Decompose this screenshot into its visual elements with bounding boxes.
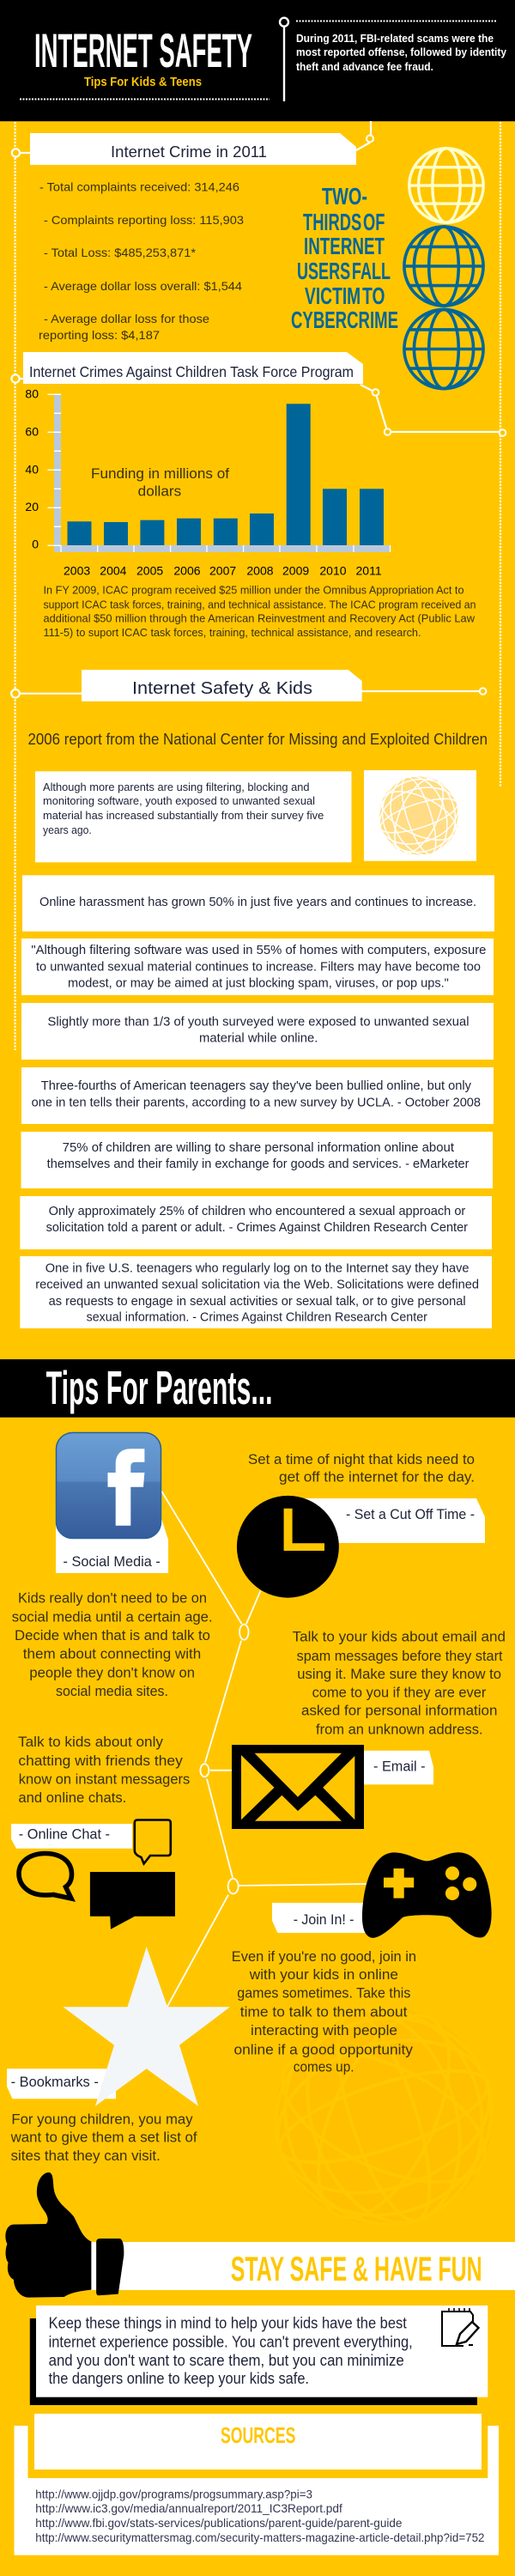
sources heading: SOURCES [221,2422,295,2448]
crime statistics list: - Total Loss: $485,253,871* [44,246,197,259]
bar chart: funding 2003-2011: 2004 [100,563,127,577]
text: join in advice: comes up. [294,2059,354,2075]
text: email advice: come to you if they are ever [312,1685,487,1701]
source links: http://www.fbi.gov/stats-services/publications/parent-guide/parent-guide [35,2516,403,2530]
bar chart: funding 2003-2011: 60 [25,424,39,438]
text: social media advice: Decide when that is and talk to [15,1627,210,1643]
closing note box: the dangers online to keep your kids safe. [49,2370,309,2387]
text: email advice: Talk to your kids about email and [293,1629,506,1645]
label: Set a Cut Off Time [296,1498,485,1543]
bar chart: funding 2003-2011: 2003 [64,563,90,577]
icon: thumbs up [5,2172,124,2298]
two-thirds callout: INTERNET [304,233,385,259]
stat box: filtering quote: modest, or may be aimed at just blocking spam, viruses, or pop ups." [68,976,449,990]
icon: facebook [57,1432,161,1539]
icon: pale globe [409,149,483,222]
text: social media advice [12,1590,213,1699]
text: online chat advice: chatting with friends they [18,1753,183,1769]
connector lines [161,1492,367,2007]
stat box: bullied online: one in ten tells their parents, according to a new survey by UCLA. - October 2008 [32,1096,481,1109]
header band: INTERNET SAFETY [34,23,252,77]
closing note box [30,2306,488,2405]
two-thirds callout: USERS FALL [297,258,391,284]
ICAC funding paragraph: support ICAC task forces, training, and technical assistance. The ICAC program received an [43,598,476,611]
text: join in advice: with your kids in online [249,1966,398,1983]
label: Social Media: - Social Media - [64,1553,161,1570]
two-thirds callout: VICTIM TO [305,283,385,309]
stat box: share personal information [21,1132,493,1188]
text: social media advice: social media until a certain age. [12,1608,213,1625]
ICAC funding paragraph: In FY 2009, ICAC program received $25 million under the Omnibus Appropriation Act to [43,584,464,597]
label: Online Chat [11,1824,132,1849]
text: email advice [293,1629,506,1737]
icon: blue globe [404,227,483,306]
stat box: bullied online: Three-fourths of American teenagers say they've been bullied online, but only [41,1079,472,1093]
icon: envelope [232,1745,364,1829]
stat box: one in five teenagers: received an unwanted sexual solicitation via the Web. Solicitations were defined [35,1279,479,1292]
stat box: one in five teenagers [20,1256,492,1328]
ICAC funding paragraph: additional $50 million through the American Reinvestment and Recovery Act (Public Law [43,611,476,624]
stat box: told a parent [20,1196,492,1249]
stat box: one in five teenagers: One in five U.S. teenagers who regularly log on to the Internet say they have [45,1262,470,1276]
text: cut off time: get off the internet for the day. [279,1469,475,1485]
stat box: share personal information: 75% of children are willing to share personal information online about [63,1141,454,1155]
text box: filtering software: Although more parents are using filtering, blocking and [43,781,309,793]
bar chart: funding 2003-2011: 2005 [136,563,163,577]
closing note box: internet experience possible. You can't prevent everything, [49,2333,413,2350]
text: bookmarks advice: sites that they can visit. [11,2148,161,2164]
text: social media advice: them about connecting with [23,1646,201,1662]
panel heading: Internet Safety & Kids: Internet Safety & Kids [132,678,312,698]
report subtitle: 2006 report from the National Center for Missing and Exploited Children [27,731,488,748]
label: Join In: - Join In! - [294,1911,354,1928]
bar chart: funding 2003-2011: 40 [25,462,39,476]
label: Join In [272,1903,378,1933]
stat box: bullied online [21,1067,494,1124]
header fact text: During 2011, FBI-related scams were the [296,32,494,45]
label: Bookmarks: - Bookmarks - [11,2074,99,2090]
chart caption: Funding in millions of [91,465,229,482]
text: email advice: spam messages before they start [297,1648,503,1664]
header band [0,0,515,122]
crime statistics list [39,180,244,342]
text: social media advice: Kids really don't need to be on [18,1590,207,1607]
text: join in advice: Even if you're no good, join in [232,1948,416,1965]
watermark globe [239,1971,515,2262]
crime statistics list: - Complaints reporting loss: 115,903 [44,213,244,227]
stat box: one third of youth: Slightly more than 1/3 of youth surveyed were exposed to unwanted sexual [48,1015,469,1029]
crime statistics list: - Average dollar loss for those [44,312,209,325]
icon: blue globe [404,309,483,389]
icon: chat bubbles [19,1820,175,1929]
text: email advice: from an unknown address. [316,1721,483,1737]
text: cut off time: Set a time of night that kids need to [248,1451,475,1467]
crime statistics list: - Average dollar loss overall: $1,544 [44,279,242,293]
label: Bookmarks [7,2069,116,2099]
text: cut off time [248,1451,475,1485]
text: join in advice: interacting with people [251,2022,397,2038]
bar chart: funding 2003-2011: 2010 [319,563,347,577]
text: online chat advice: know on instant messagers [19,1771,190,1788]
stat box: one third of youth [21,1003,494,1060]
text: social media advice: social media sites. [56,1683,168,1699]
text: join in advice: games sometimes. Take this [237,1985,410,2002]
subtitle: Tips For Kids & Teens [84,75,202,89]
chart caption [91,465,229,500]
two-thirds callout: THIRDS OF [303,209,385,235]
bar chart: funding 2003-2011: 2008 [246,563,274,577]
source links [35,2487,485,2544]
panel heading: Internet Safety & Kids [11,670,486,702]
stat box: one in five teenagers: sexual information. - Crimes Against Children Research Center [87,1311,427,1325]
source links: http://www.ic3.gov/media/annualreport/2011_IC3Report.pdf [35,2501,342,2515]
text box: filtering software: monitoring software, youth exposed to unwanted sexual [43,794,315,807]
text: email advice: asked for personal information [301,1702,497,1718]
panel heading: task force program: Internet Crimes Against Children Task Force Program [29,363,354,380]
text box: filtering software [35,771,352,862]
two-thirds callout: CYBERCRIME [291,307,398,333]
text box: filtering software: years ago. [43,823,92,836]
stat box: one third of youth: material while online. [199,1031,318,1045]
image box: wireframe globe [364,762,476,869]
bar chart: funding 2003-2011: 2009 [282,563,309,577]
text: social media advice: people they don't know on [29,1664,195,1680]
ICAC funding paragraph [43,584,476,639]
closing note box: Keep these things in mind to help your kids have the best [49,2315,407,2332]
text: bookmarks advice [10,2111,197,2164]
panel heading: Internet Crime in 2011 [12,121,373,165]
stat box: told a parent: Only approximately 25% of children who encountered a sexual approach or [49,1205,465,1218]
bar chart: funding 2003-2011: 2011 [355,563,382,577]
two-thirds callout: TWO- [322,183,367,210]
stat box: filtering quote: "Although filtering software was used in 55% of homes with computers, exposure [31,944,486,957]
bar chart: funding 2003-2011: 2006 [173,563,201,577]
stat box: told a parent: solicitation told a parent or adult. - Crimes Against Children Research Center [46,1221,468,1235]
text: bookmarks advice: For young children, you may [11,2111,193,2127]
text: join in advice [232,1948,416,2075]
label: Social Media [56,1494,168,1573]
label: Online Chat: - Online Chat - [19,1826,110,1843]
banner: stay safe and have fun [86,2242,515,2290]
header fact text: theft and advance fee fraud. [296,60,433,73]
icon: clock [237,1496,339,1598]
sources panel [14,2414,499,2555]
ICAC funding paragraph: 111-5) to suport ICAC task forces, training, technical assistance, and research. [43,626,421,639]
bar chart: funding 2003-2011: 20 [25,500,39,513]
chart caption: dollars [138,483,181,500]
stat box: online harassment: Online harassment has grown 50% in just five years and continues to increase. [39,896,476,909]
icon: star [64,1947,230,2106]
text: email advice: using it. Make sure they know to [297,1666,501,1682]
stat box: online harassment [22,875,494,932]
stat box: one in five teenagers: as requests to engage in sexual activities or sexual talk, or to give personal [49,1295,466,1309]
closing note box: and you don't want to scare them, but you can minimize [49,2352,404,2369]
text: online chat advice: and online chats. [18,1789,126,1806]
band: Tips For Parents: Tips For Parents... [46,1361,273,1414]
crime statistics list: reporting loss: $4,187 [39,328,160,342]
text: join in advice: time to talk to them about [240,2004,408,2020]
icon: game controller [362,1852,492,1938]
label: Set a Cut Off Time: - Set a Cut Off Time - [346,1506,475,1522]
label: Email: - Email - [373,1759,426,1775]
stat box: share personal information: themselves and their family in exchange for goods and services. - eMarketer [47,1157,470,1171]
text: online chat advice [18,1734,190,1806]
text: join in advice: online if a good opportunity [233,2041,414,2057]
icon: notepad and pencil [442,2308,479,2346]
source links: http://www.ojjdp.gov/programs/progsummary.asp?pi=3 [35,2487,312,2500]
text: bookmarks advice: want to give them a set list of [10,2129,197,2145]
two-thirds callout [291,183,398,333]
bar chart: funding 2003-2011: 2007 [209,563,236,577]
text: online chat advice: Talk to kids about only [18,1734,164,1750]
label: Email [364,1751,433,1784]
crime statistics list: - Total complaints received: 314,246 [39,180,239,194]
header fact text [296,32,507,73]
stat box: filtering quote: to unwanted sexual material continues to increase. Filters may have become too [36,960,481,974]
stat box: filtering quote [21,939,494,995]
panel heading: task force program [11,352,506,436]
bar chart: funding 2003-2011 [25,386,391,577]
panel heading: Internet Crime in 2011: Internet Crime in 2011 [111,143,267,161]
text box: filtering software: material has increased substantially from their survey five [43,809,324,822]
bar chart: funding 2003-2011: 80 [25,386,39,400]
source links: http://www.securitymattersmag.com/security-matters-magazine-article-detail.php?id=752 [35,2530,485,2544]
bar chart: funding 2003-2011: 0 [32,538,39,551]
